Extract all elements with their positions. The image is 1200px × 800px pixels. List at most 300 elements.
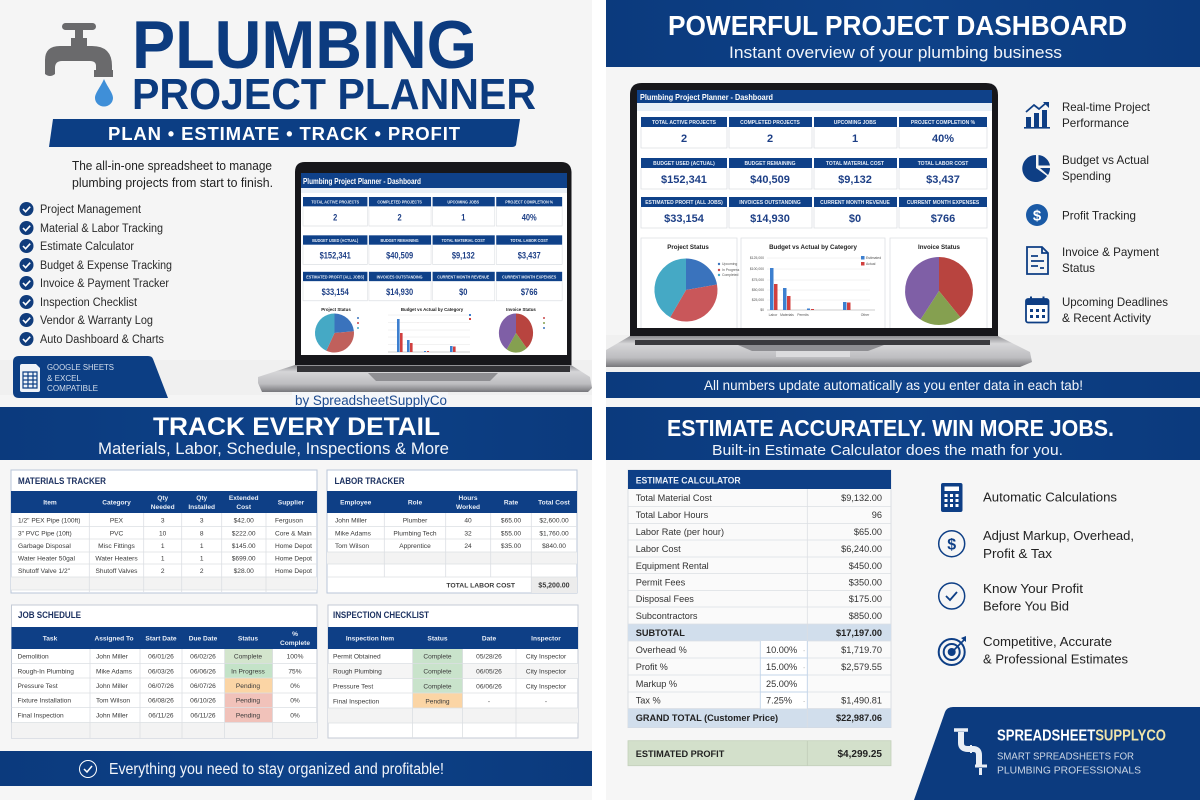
- table: inspection checklist: [328, 605, 578, 738]
- table: materials tracker: 1: [161, 543, 165, 550]
- feature: adjust markup overhead profit and tax: Profit & Tax: [983, 547, 1053, 561]
- KPI cards: [303, 197, 562, 301]
- table: labor tracker: $35.00: [501, 543, 521, 550]
- table: estimate calculator: 25.00%: [766, 679, 797, 689]
- checklist of features: Inspection Checklist: [40, 297, 138, 309]
- KPI cards: BUDGET USED (ACTUAL): [312, 237, 359, 243]
- table: job schedule: John Miller: [96, 654, 129, 660]
- table: materials tracker: Water Heaters: [95, 556, 138, 562]
- table: materials tracker: Supplier: [278, 500, 305, 506]
- feature: competitive accurate and professional estimates: [939, 635, 1128, 666]
- table: estimate calculator: 96: [872, 510, 882, 520]
- table: labor tracker: 40: [464, 518, 472, 524]
- table: job schedule: Rough-In Plumbing: [18, 668, 74, 676]
- table: inspection checklist: 06/05/26: [476, 668, 502, 676]
- table: job schedule: 06/06/26: [190, 668, 216, 676]
- KPI cards: 40%: [522, 212, 537, 223]
- title: plumbing: PLUMBING: [132, 7, 477, 83]
- table: materials tracker: Extended: [229, 495, 259, 502]
- KPI cards: UPCOMING JOBS: [447, 199, 479, 205]
- feature: profit tracking: [1026, 204, 1136, 226]
- table: materials tracker: Category: [102, 500, 131, 506]
- chart: budget vs actual bars: Labor: [769, 313, 778, 317]
- table: materials tracker: Home Depot: [275, 568, 312, 575]
- badge: google sheets and excel compatible: GOOGLE SHEETS: [47, 362, 114, 372]
- KPI cards: CURRENT MONTH REVENUE: [820, 200, 891, 206]
- table: materials tracker: 1: [200, 556, 204, 562]
- table: labor tracker: Tom Wilson: [335, 543, 369, 550]
- brand box: spreadsheetsupplyco: [914, 707, 1200, 800]
- table: estimate calculator: $6,240.00: [841, 544, 882, 554]
- table: estimate calculator: GRAND TOTAL (Customer Price): [636, 713, 778, 723]
- table: labor tracker: Mike Adams: [335, 530, 372, 538]
- table: inspection checklist: Pressure Test: [333, 684, 373, 690]
- KPI cards: 1: [852, 133, 858, 145]
- table: materials tracker: $28.00: [234, 568, 254, 575]
- laptop with dashboard: [258, 162, 592, 392]
- table: estimate calculator: Overhead %: [636, 645, 687, 655]
- chart: budget vs actual bars: $75,000: [752, 278, 764, 282]
- table: inspection checklist: Inspector: [531, 636, 561, 642]
- table: labor tracker: $65.00: [501, 518, 521, 524]
- table: materials tracker: 10: [159, 530, 167, 538]
- panel: estimate accurately: [606, 407, 1200, 800]
- banner: everything you need: [0, 751, 592, 786]
- KPI cards: 2: [333, 212, 338, 223]
- laptop bezel: [295, 162, 572, 365]
- table: inspection checklist: Complete: [423, 668, 452, 676]
- chart: budget vs actual bars: $100,000: [750, 267, 764, 271]
- table: materials tracker: $145.00: [232, 543, 256, 550]
- table: estimate calculator: Profit %: [636, 662, 668, 672]
- KPI cards: 2: [681, 133, 687, 145]
- table: inspection checklist: Pending: [425, 698, 450, 706]
- table: inspection checklist: Permit Obtained: [333, 654, 381, 660]
- chart: budget vs actual bars: Other: [861, 313, 870, 317]
- heading band: [606, 0, 1200, 67]
- KPI cards: $0: [459, 286, 468, 297]
- icon: dollar circle: [939, 531, 965, 557]
- chart: budget vs actual bars: Budget vs Actual by Category: [401, 307, 464, 312]
- table: materials tracker: 3: [161, 518, 165, 524]
- feature: automatic calculations: [941, 483, 1117, 512]
- table: estimate calculator: SUBTOTAL: [636, 628, 685, 638]
- table: materials tracker: Cost: [236, 504, 252, 511]
- icon: calendar: [1026, 296, 1048, 322]
- table: job schedule: In Progress: [231, 668, 266, 676]
- KPI cards: INVOICES OUTSTANDING: [377, 274, 423, 279]
- table: materials tracker: 2: [161, 568, 165, 575]
- badge: google sheets and excel compatible: [13, 356, 168, 398]
- KPI cards: BUDGET REMAINING: [381, 237, 419, 243]
- title: project planner: PROJECT PLANNER: [132, 70, 536, 119]
- KPI cards: 2: [398, 212, 402, 223]
- KPI cards: $33,154: [664, 213, 705, 225]
- checklist of features: Estimate Calculator: [40, 241, 134, 253]
- KPI cards: PROJECT COMPLETION %: [505, 199, 553, 205]
- table: estimate calculator: [628, 470, 891, 728]
- table: labor tracker: Total Cost: [538, 500, 571, 506]
- KPI cards: $40,509: [750, 174, 790, 186]
- chart: budget vs actual bars: [388, 307, 471, 352]
- table: labor tracker: Plumbing Tech: [393, 530, 437, 538]
- checklist of features: Vendor & Warranty Log: [40, 315, 153, 327]
- table: estimate calculator: $65.00: [854, 527, 882, 537]
- table: job schedule: Start Date: [145, 636, 177, 642]
- feature: real-time project performance: Real-time Project: [1062, 100, 1151, 114]
- estimated profit row: [628, 741, 891, 766]
- KPI cards: TOTAL LABOR COST: [918, 161, 968, 167]
- table: estimate calculator: Subcontractors: [636, 611, 698, 621]
- table: inspection checklist: Inspection Item: [346, 636, 394, 642]
- table: job schedule: Pending: [236, 698, 260, 704]
- table: labor tracker: Hours: [458, 495, 478, 502]
- feature: competitive accurate and professional estimates: & Professional Estimates: [983, 652, 1128, 666]
- icon: calculator: [941, 483, 962, 512]
- table: estimate calculator: Tax %: [636, 696, 661, 706]
- dashboard header: [301, 173, 567, 193]
- brand box: spreadsheetsupplyco: PLUMBING PROFESSIONALS: [997, 766, 1141, 776]
- chart: budget vs actual bars: $125,000: [750, 256, 764, 260]
- laptop base: [258, 365, 592, 392]
- KPI cards: $766: [931, 213, 955, 225]
- table: job schedule: 75%: [288, 668, 302, 676]
- table: job schedule: Demolition: [18, 654, 49, 660]
- heading band: Built-in Estimate Calculator does the math for you.: [712, 442, 1063, 459]
- heading band: Materials, Labor, Schedule, Inspections & More: [98, 440, 449, 458]
- KPI cards: $9,132: [838, 174, 872, 186]
- table: job schedule: 06/08/26: [148, 698, 174, 704]
- table: job schedule: 06/11/26: [148, 712, 174, 720]
- feature: invoice and payment status: Status: [1062, 261, 1095, 275]
- KPI cards: TOTAL MATERIAL COST: [442, 237, 485, 243]
- chart: invoice status pie: Invoice Status: [918, 244, 961, 251]
- banner: numbers update automatically: All numbers update automatically as you enter data in each tab!: [704, 377, 1083, 393]
- KPI cards: $152,341: [320, 250, 351, 261]
- table: job schedule: 06/03/26: [148, 668, 174, 676]
- heading band: Instant overview of your plumbing business: [729, 43, 1062, 62]
- chart: budget vs actual bars: Actual: [866, 262, 876, 266]
- chart: budget vs actual bars: [741, 238, 885, 328]
- table: materials tracker: [11, 470, 317, 593]
- table: inspection checklist: City Inspector: [526, 668, 567, 676]
- table: labor tracker: [327, 470, 577, 593]
- table: materials tracker: 2: [200, 568, 204, 575]
- table: estimate calculator: 15.00%: [766, 662, 797, 672]
- table: materials tracker: 1: [200, 543, 204, 550]
- table: labor tracker: Plumber: [403, 518, 428, 524]
- table: estimate calculator: $450.00: [849, 561, 882, 571]
- KPI cards: PROJECT COMPLETION %: [911, 120, 976, 126]
- table: estimate calculator: -: [803, 648, 806, 655]
- table: labor tracker: 24: [464, 543, 472, 550]
- table: materials tracker: 8: [200, 530, 204, 538]
- KPI cards: CURRENT MONTH EXPENSES: [907, 200, 980, 206]
- table: labor tracker: 32: [464, 530, 472, 538]
- brand box: spreadsheetsupplyco: SMART SPREADSHEETS FOR: [997, 752, 1134, 762]
- KPI cards: TOTAL ACTIVE PROJECTS: [652, 120, 717, 126]
- KPI cards: CURRENT MONTH EXPENSES: [502, 274, 556, 279]
- table: job schedule: 100%: [287, 654, 304, 660]
- table: inspection checklist: City Inspector: [526, 684, 567, 690]
- heading band: ESTIMATE ACCURATELY. WIN MORE JOBS.: [667, 415, 1114, 441]
- chart: budget vs actual bars: Permits: [797, 313, 809, 317]
- badge: google sheets and excel compatible: COMPATIBLE: [47, 383, 98, 393]
- KPI cards: 2: [767, 133, 773, 145]
- table: estimate calculator: -: [803, 665, 806, 672]
- chart: invoice status pie: Invoice Status: [506, 307, 536, 312]
- icon: pie chart: [1022, 155, 1050, 182]
- intro text: plumbing projects from start to finish.: [72, 175, 273, 190]
- table: estimate calculator: Total Labor Hours: [636, 510, 709, 520]
- table: estimate calculator: Equipment Rental: [636, 561, 709, 571]
- KPI cards: $33,154: [322, 286, 349, 297]
- table: materials tracker: Shutoff Valve 1/2": [18, 568, 71, 575]
- table: job schedule: Complete: [234, 654, 262, 660]
- table: estimate calculator: Disposal Fees: [636, 594, 694, 604]
- KPI cards: UPCOMING JOBS: [834, 120, 877, 126]
- KPI cards: $14,930: [386, 286, 413, 297]
- table: materials tracker: Home Depot: [275, 543, 312, 550]
- table: materials tracker: Misc Fittings: [98, 543, 136, 550]
- table: estimate calculator: 7.25%: [766, 696, 792, 706]
- feature: real-time project performance: Performance: [1062, 116, 1129, 130]
- table: materials tracker: 1: [161, 556, 165, 562]
- table: estimate calculator: Labor Rate (per hour): [636, 527, 724, 537]
- panel: track every detail: [0, 407, 592, 786]
- KPI cards: TOTAL MATERIAL COST: [826, 161, 884, 167]
- table: job schedule: Assigned To: [94, 636, 134, 642]
- dashboard header: Plumbing Project Planner - Dashboard: [303, 177, 421, 186]
- table: job schedule: 06/02/26: [190, 654, 216, 660]
- intro text: The all-in-one spreadsheet to manage: [72, 158, 272, 173]
- table: job schedule: Final Inspection: [18, 712, 64, 720]
- table: inspection checklist: Status: [427, 636, 448, 642]
- KPI cards: BUDGET REMAINING: [744, 161, 796, 167]
- table: materials tracker: PEX: [110, 518, 124, 524]
- table: materials tracker: 3: [200, 518, 204, 524]
- dashboard header: [637, 90, 992, 111]
- icon: water drop: [95, 79, 113, 107]
- chart: project status pie: Upcoming: [722, 262, 737, 266]
- table: materials tracker: Core & Main: [275, 530, 312, 538]
- table: job schedule: Mike Adams: [96, 668, 133, 676]
- feature: adjust markup overhead profit and tax: Adjust Markup, Overhead,: [983, 529, 1134, 543]
- table: materials tracker: Water Heater 50gal: [18, 556, 75, 562]
- table: inspection checklist: INSPECTION CHECKLIST: [333, 610, 429, 620]
- feature: upcoming deadlines and recent activity: [1026, 295, 1168, 325]
- table: job schedule: Pending: [236, 683, 260, 690]
- KPI cards: TOTAL LABOR COST: [510, 237, 548, 243]
- KPI cards: COMPLETED PROJECTS: [740, 120, 801, 126]
- table: labor tracker: $1,760.00: [539, 530, 569, 538]
- icon: check circle: [939, 583, 965, 609]
- KPI cards: BUDGET USED (ACTUAL): [653, 161, 715, 167]
- table: labor tracker: $5,200.00: [538, 582, 570, 590]
- feature: profit tracking: Profit Tracking: [1062, 208, 1136, 222]
- table: job schedule: Complete: [280, 640, 310, 647]
- feature: invoice and payment status: Invoice & Payment: [1062, 245, 1160, 259]
- table: job schedule: 06/10/26: [190, 698, 216, 704]
- icon: dollar coin: $: [1033, 208, 1042, 224]
- table: job schedule: Task: [43, 636, 58, 642]
- KPI cards: ESTIMATED PROFIT (ALL JOBS): [306, 274, 365, 279]
- feature: adjust markup overhead profit and tax: [939, 529, 1134, 561]
- banner: everything you need: Everything you need to stay organized and profitable!: [109, 761, 444, 778]
- table: estimate calculator: $1,490.81: [841, 696, 882, 706]
- table: materials tracker: Item: [43, 500, 57, 506]
- table: inspection checklist: -: [488, 698, 490, 706]
- laptop bezel: [630, 83, 998, 336]
- table: job schedule: Pressure Test: [18, 683, 58, 690]
- table: materials tracker: Shutoff Valves: [96, 568, 138, 575]
- heading band: [0, 407, 592, 460]
- table: job schedule: Tom Wilson: [96, 698, 130, 704]
- table: materials tracker: Installed: [188, 504, 215, 511]
- table: materials tracker: Ferguson: [275, 518, 303, 524]
- table: job schedule: 06/07/26: [190, 683, 216, 690]
- table: job schedule: 06/01/26: [148, 654, 174, 660]
- feature: know your profit before you bid: Before You Bid: [983, 600, 1069, 614]
- byline: by SpreadsheetSupplyCo: [295, 393, 447, 408]
- table: labor tracker: $2,600.00: [539, 518, 569, 524]
- ribbon: plan estimate track profit: [49, 119, 520, 147]
- panel: plumbing project planner cover: [13, 7, 592, 408]
- table: job schedule: %: [292, 631, 298, 638]
- table: inspection checklist: 06/06/26: [476, 684, 502, 690]
- table: job schedule: Due Date: [189, 636, 218, 642]
- feature: budget vs actual spending: Budget vs Actual: [1062, 153, 1149, 167]
- feature: upcoming deadlines and recent activity: & Recent Activity: [1062, 311, 1151, 325]
- table: materials tracker: Home Depot: [275, 556, 312, 562]
- icon: dollar circle: $: [947, 536, 956, 554]
- feature: real-time project performance: [1024, 100, 1151, 130]
- chart: budget vs actual bars: $25,000: [752, 298, 764, 302]
- feature: budget vs actual spending: [1022, 153, 1149, 183]
- table: materials tracker: Garbage Disposal: [18, 543, 71, 550]
- table: estimate calculator: $22,987.06: [836, 713, 882, 723]
- table: materials tracker: 3" PVC Pipe (10ft): [18, 530, 72, 538]
- table: estimate calculator: $350.00: [849, 578, 882, 588]
- heading band: POWERFUL PROJECT DASHBOARD: [668, 10, 1127, 41]
- KPI cards: $0: [849, 213, 861, 225]
- table: job schedule: JOB SCHEDULE: [18, 610, 81, 620]
- table: inspection checklist: Complete: [423, 684, 452, 690]
- brand box: spreadsheetsupplyco: SPREADSHEETSUPPLYCO: [997, 728, 1166, 744]
- table: estimate calculator: Markup %: [636, 679, 677, 689]
- chart: project status pie: Project Status: [321, 307, 351, 312]
- table: estimate calculator: Permit Fees: [636, 578, 686, 588]
- table: labor tracker: Apprentice: [399, 543, 431, 550]
- table: estimate calculator: -: [803, 698, 806, 706]
- chart: budget vs actual bars: $50,000: [752, 288, 764, 292]
- feature: know your profit before you bid: Know Your Profit: [983, 582, 1084, 596]
- panel: powerful project dashboard: [606, 0, 1200, 398]
- table: estimate calculator: $2,579.55: [841, 662, 882, 672]
- table: job schedule: [12, 605, 317, 738]
- table: job schedule: 06/11/26: [190, 712, 216, 720]
- table: inspection checklist: Rough Plumbing: [333, 668, 382, 676]
- table: inspection checklist: Date: [482, 636, 496, 642]
- table: job schedule: 0%: [290, 698, 300, 704]
- table: estimate calculator: 10.00%: [766, 645, 797, 655]
- table: estimate calculator: $175.00: [849, 594, 882, 604]
- table: estimate calculator: $1,719.70: [841, 645, 882, 655]
- table: estimate calculator: $850.00: [849, 611, 882, 621]
- table: job schedule: Pending: [236, 712, 260, 720]
- feature: invoice and payment status: [1027, 245, 1160, 275]
- table: labor tracker: Employee: [340, 500, 372, 506]
- ribbon: plan estimate track profit: PLAN • ESTIMATE • TRACK • PROFIT: [108, 123, 461, 144]
- table: job schedule: 0%: [290, 712, 300, 720]
- table: inspection checklist: City Inspector: [526, 654, 567, 660]
- chart: invoice status pie: [890, 238, 987, 328]
- icon: target: [939, 636, 966, 665]
- heading band: [606, 407, 1200, 460]
- icon: spreadsheet: [20, 364, 40, 392]
- KPI cards: COMPLETED PROJECTS: [377, 199, 422, 205]
- KPI cards: $14,930: [750, 213, 790, 225]
- table: materials tracker: 1/2" PEX Pipe (100ft): [18, 518, 80, 524]
- table: job schedule: Fixture Installation: [18, 698, 71, 704]
- KPI cards: $40,509: [386, 250, 413, 261]
- table: materials tracker: MATERIALS TRACKER: [18, 476, 106, 486]
- KPI cards: CURRENT MONTH REVENUE: [437, 274, 489, 279]
- table: job schedule: 06/07/26: [148, 683, 174, 690]
- table: materials tracker: $699.00: [232, 556, 256, 562]
- table: estimate calculator: Total Material Cost: [636, 493, 712, 503]
- feature: budget vs actual spending: Spending: [1062, 169, 1111, 183]
- banner: numbers update automatically: [606, 372, 1200, 398]
- checklist of features: Project Management: [40, 204, 142, 216]
- chart: project status pie: Project Status: [667, 244, 709, 251]
- checklist of features: Auto Dashboard & Charts: [40, 334, 164, 346]
- chart: project status pie: Completed: [722, 273, 739, 277]
- table: labor tracker: John Miller: [335, 518, 368, 524]
- KPI cards: $766: [521, 286, 538, 297]
- table: materials tracker: $222.00: [232, 530, 256, 538]
- icon: document: [1027, 247, 1048, 274]
- KPI cards: 1: [461, 212, 466, 223]
- table: estimate calculator: $9,132.00: [841, 493, 882, 503]
- table: estimate calculator: Labor Cost: [636, 544, 681, 554]
- table: inspection checklist: -: [545, 698, 547, 706]
- feature: competitive accurate and professional estimates: Competitive, Accurate: [983, 635, 1112, 649]
- chart: project status pie: In Progress: [722, 268, 740, 272]
- table: materials tracker: PVC: [110, 530, 124, 538]
- laptop base: [606, 336, 1032, 367]
- table: labor tracker: TOTAL LABOR COST: [446, 582, 516, 590]
- checklist of features: Budget & Expense Tracking: [40, 260, 172, 272]
- dashboard header: Plumbing Project Planner - Dashboard: [640, 92, 773, 102]
- KPI cards: TOTAL ACTIVE PROJECTS: [311, 199, 359, 205]
- chart: budget vs actual bars: Materials: [780, 313, 794, 317]
- table: job schedule: John Miller: [96, 712, 129, 720]
- table: inspection checklist: 05/28/26: [476, 654, 502, 660]
- intro text: [72, 158, 273, 190]
- feature: upcoming deadlines and recent activity: Upcoming Deadlines: [1062, 295, 1168, 309]
- checklist of features: [20, 202, 172, 346]
- chart: budget vs actual bars: Estimated: [866, 256, 881, 260]
- table: materials tracker: Qty: [157, 495, 169, 502]
- table: job schedule: John Miller: [96, 683, 129, 690]
- chart: invoice status pie: [499, 307, 545, 353]
- chart: budget vs actual bars: $0: [760, 308, 764, 312]
- table: labor tracker: $55.00: [501, 530, 521, 538]
- table: labor tracker: $840.00: [542, 543, 566, 550]
- table: inspection checklist: Complete: [423, 654, 452, 660]
- table: labor tracker: LABOR TRACKER: [334, 476, 405, 486]
